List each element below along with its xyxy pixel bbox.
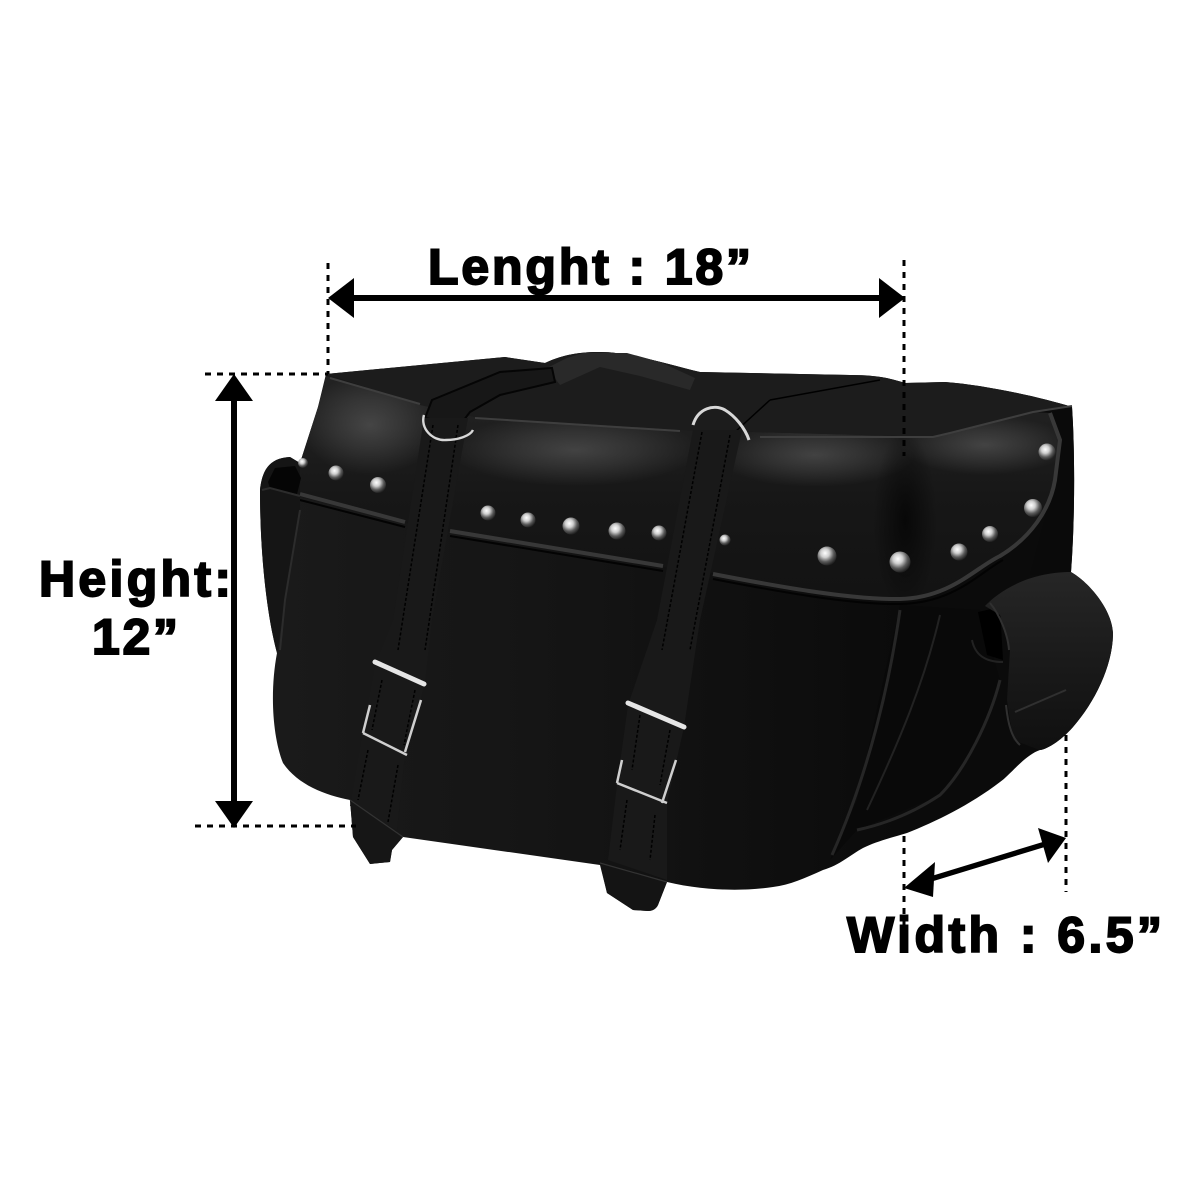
flap edge welt	[300, 413, 1060, 599]
left strap	[350, 418, 468, 864]
label: length: Lenght : 18”	[428, 239, 751, 295]
left buckle	[363, 662, 424, 755]
bag right side edge	[1030, 407, 1074, 575]
infographic: saddlebag dimensions	[41, 246, 1160, 954]
left side pocket	[260, 457, 301, 653]
D-ring left	[423, 415, 473, 440]
bag silhouette	[260, 352, 1113, 911]
handle strap loop	[425, 368, 555, 425]
right strap	[600, 430, 742, 911]
carry handle	[547, 353, 695, 390]
right side pocket with flap	[830, 572, 1113, 860]
right buckle	[617, 703, 684, 803]
label: height value: 12”	[92, 609, 178, 665]
lid top	[326, 352, 1072, 437]
label: width: Width : 6.5”	[847, 907, 1162, 963]
lid seam	[330, 378, 1072, 437]
arrow: width	[904, 828, 1066, 897]
front flap with soft highlights	[302, 376, 1058, 588]
arrow: height	[215, 374, 253, 828]
chrome studs	[298, 444, 1056, 572]
dotted guide lines	[195, 260, 1066, 942]
arrow: length	[328, 278, 905, 318]
D-ring right	[693, 407, 749, 440]
saddlebag product illustration	[260, 352, 1113, 911]
label: height: Height:	[39, 551, 231, 607]
